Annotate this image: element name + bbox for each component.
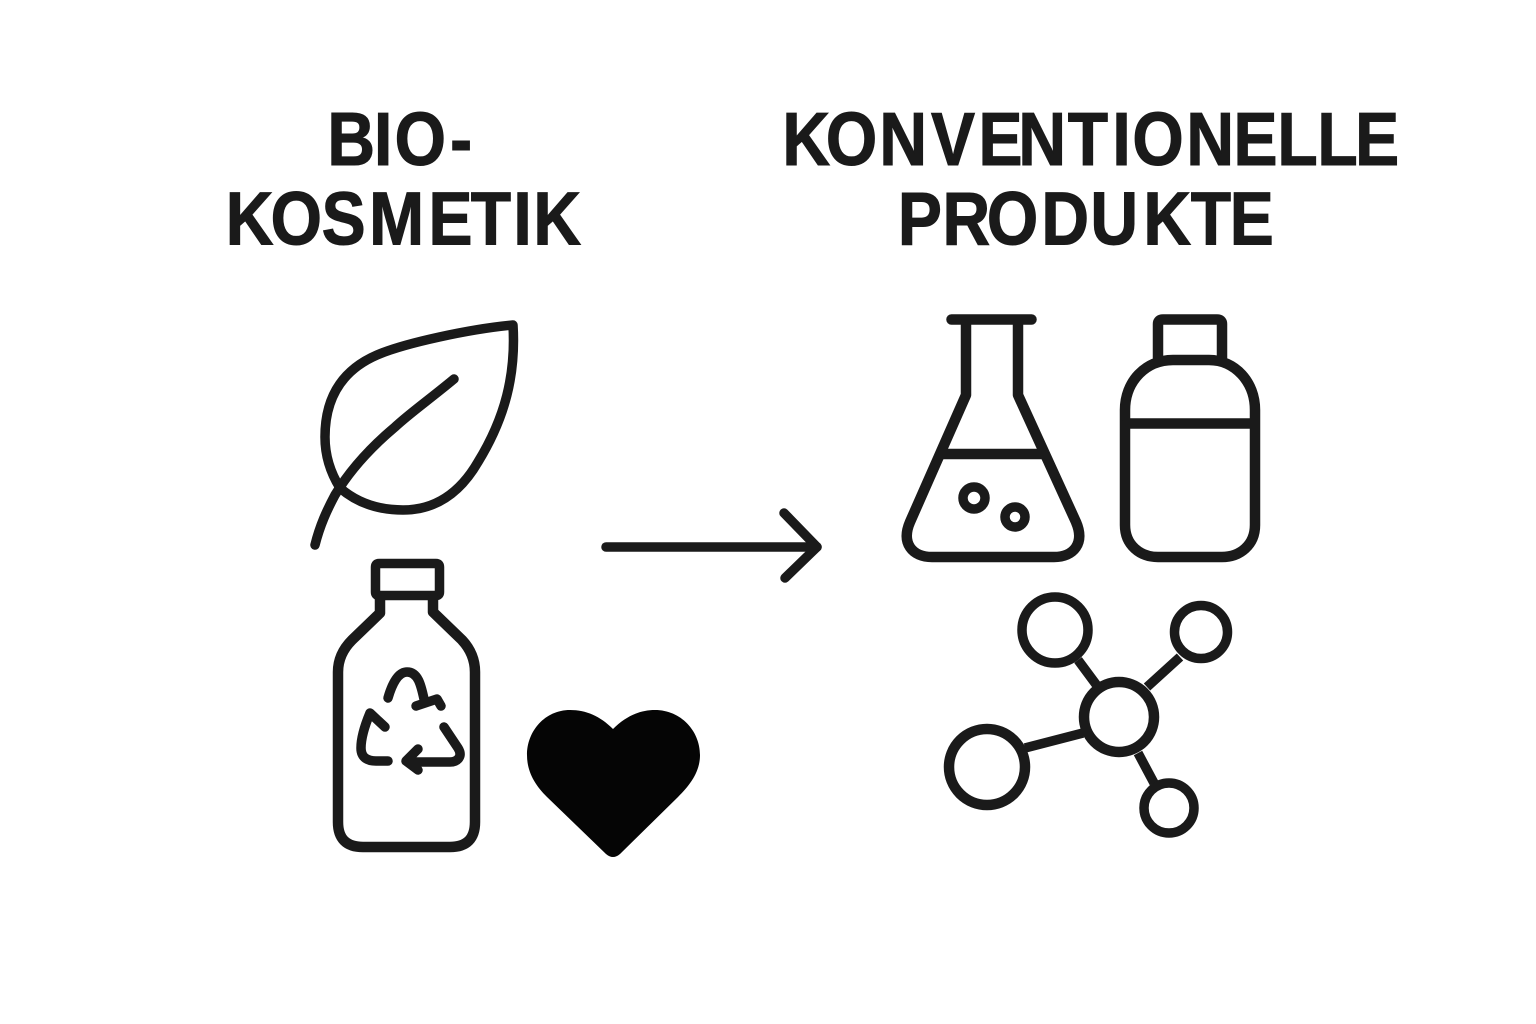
icon: recycling bottle	[338, 564, 475, 847]
icon: molecule	[949, 597, 1228, 833]
icon: flask	[907, 320, 1079, 557]
heading: Bio-Kosmetik	[226, 97, 581, 260]
icon: bubbles	[963, 487, 1025, 527]
heading: Bio-Kosmetik: KOSMETIK	[226, 177, 581, 260]
icon: recycling arrows	[361, 672, 460, 770]
arrow: to conventional products	[606, 513, 817, 578]
heading: Konventionelle Produkte: KONVENTIONELLE	[782, 97, 1399, 181]
heading: Bio-Kosmetik: BIO-	[327, 97, 472, 181]
icon: leaf	[315, 325, 513, 545]
heading: Konventionelle Produkte	[782, 97, 1399, 260]
heading: Konventionelle Produkte: PRODUKTE	[898, 177, 1274, 260]
icon: chemical bottle	[1125, 320, 1255, 557]
icon: heart	[527, 710, 700, 857]
